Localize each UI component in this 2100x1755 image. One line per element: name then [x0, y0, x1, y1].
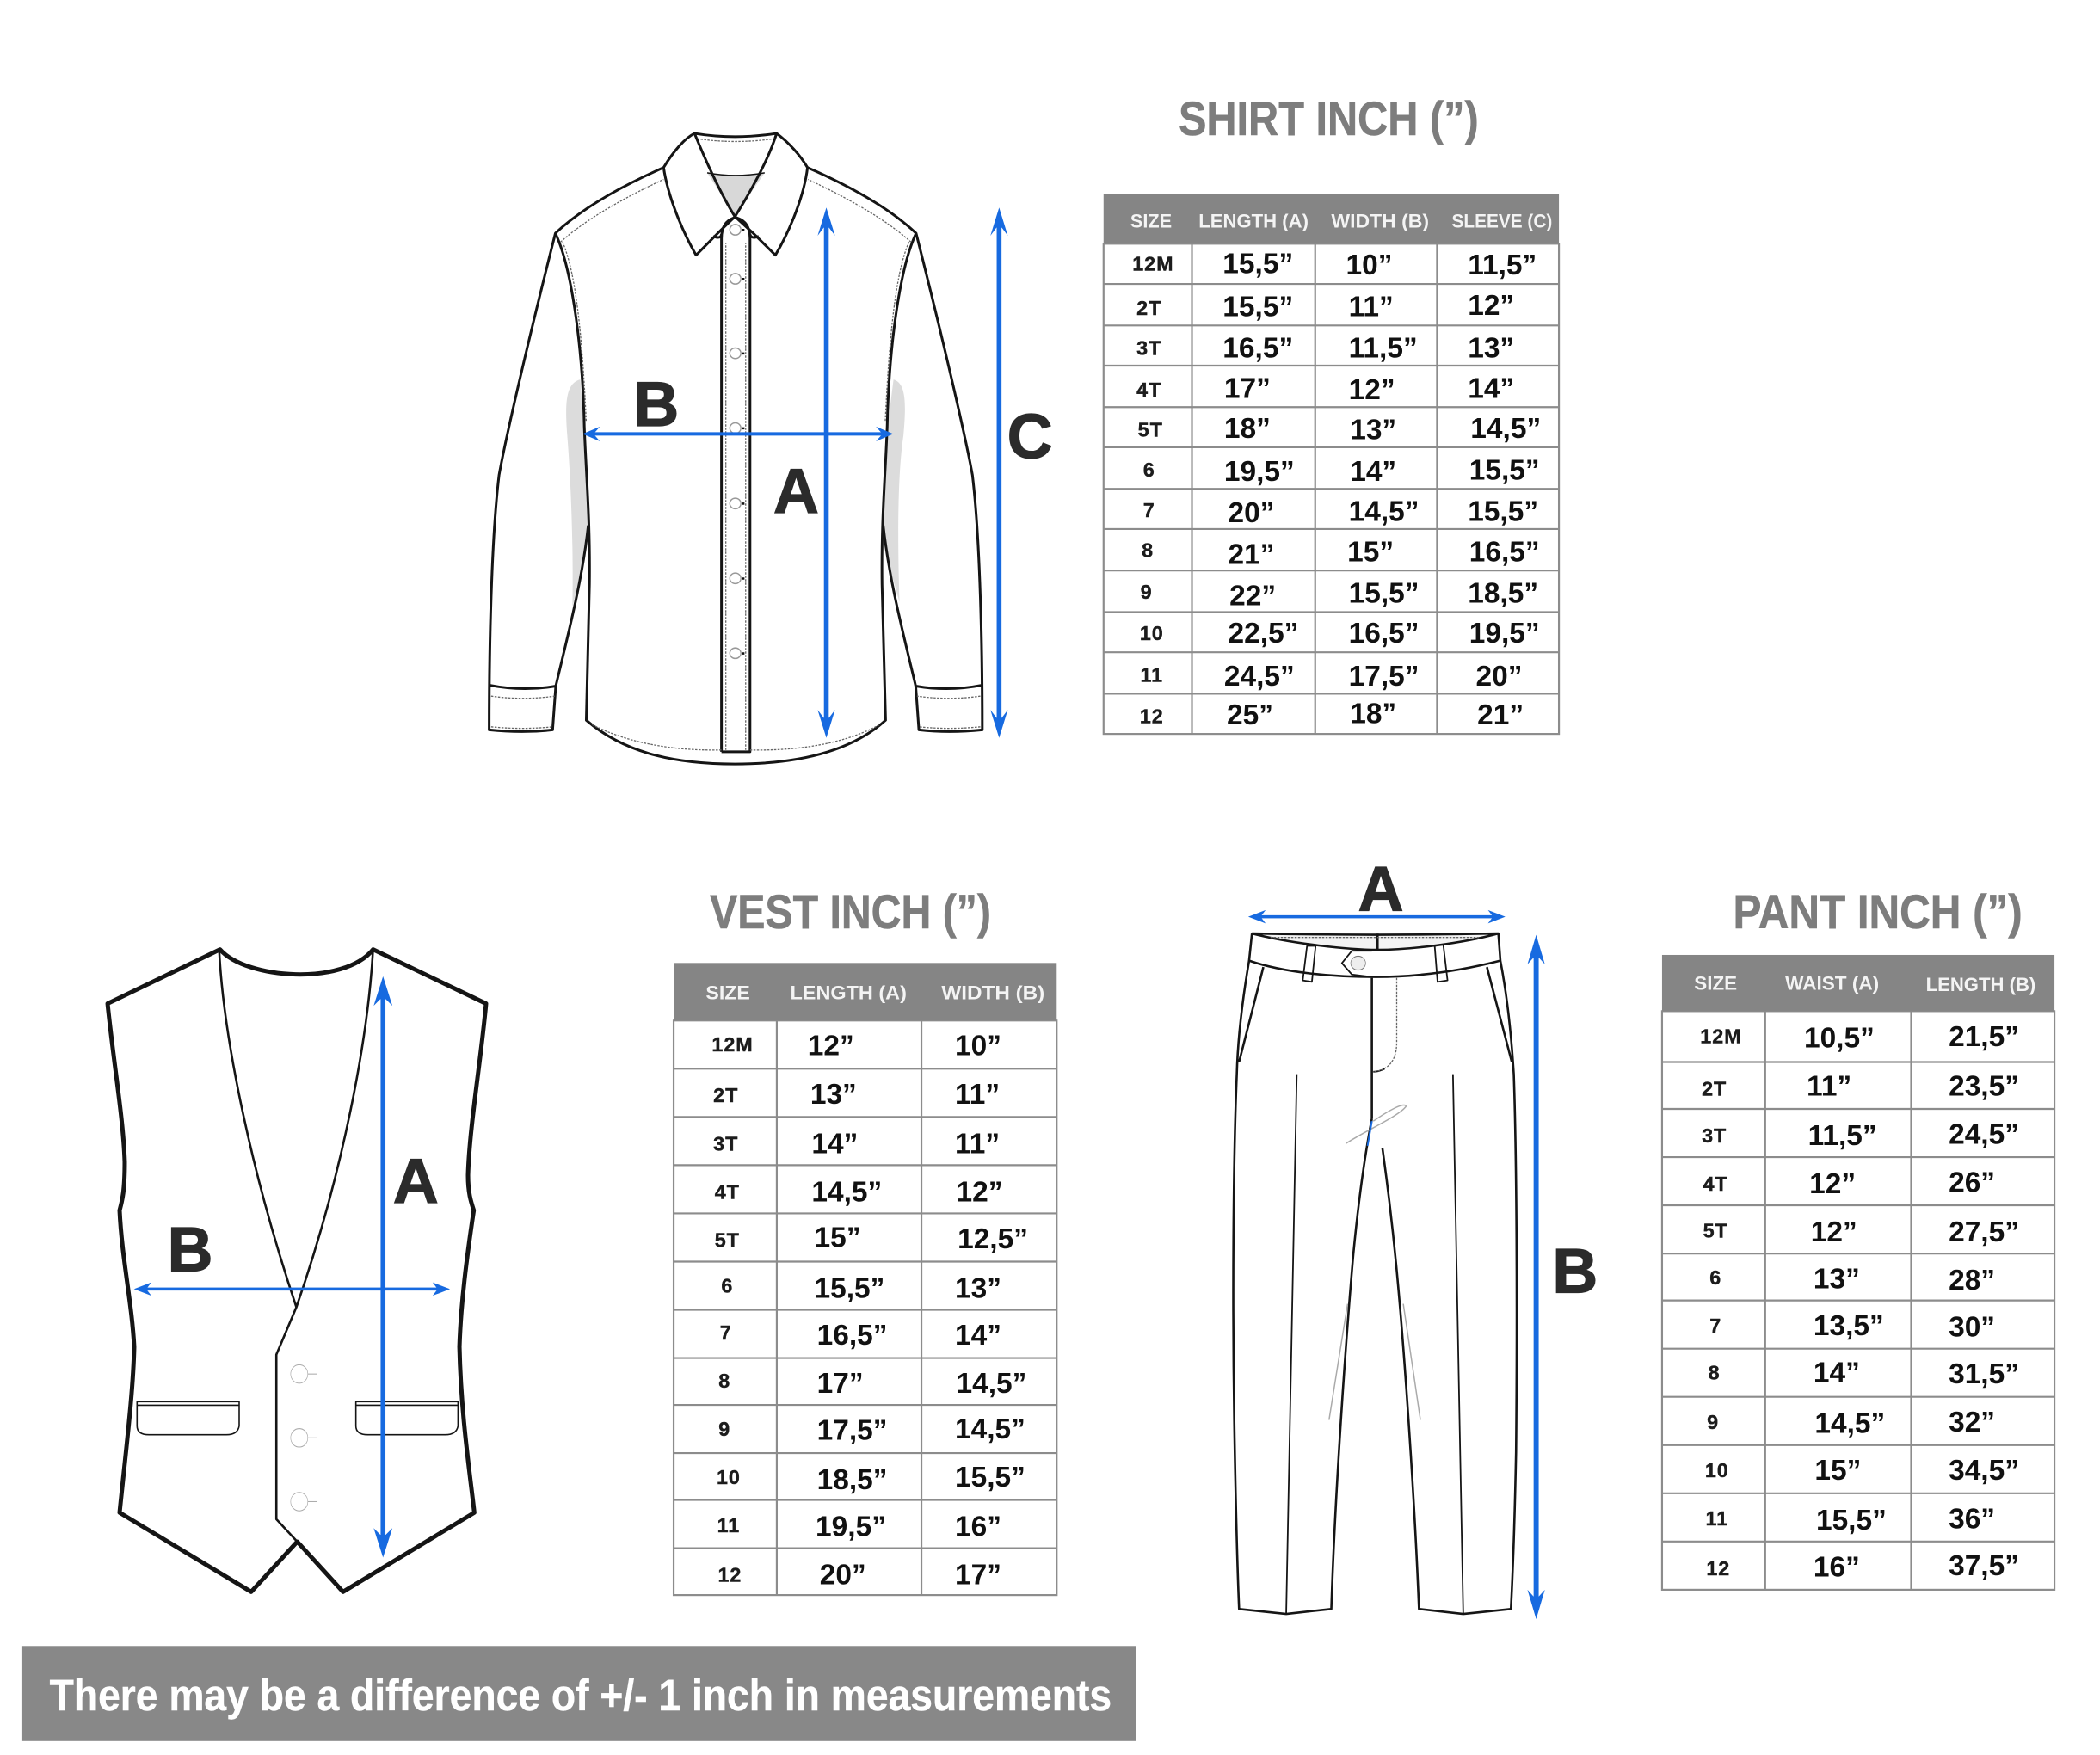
pant row 10: 34,5”: [1949, 1455, 2019, 1487]
table: pant: [1662, 955, 2054, 1590]
vest row 8: 17”: [817, 1368, 864, 1400]
pant row 4T: 12”: [1809, 1168, 1856, 1200]
letter A: A: [393, 1146, 439, 1216]
pant row 7: [1709, 1310, 1995, 1344]
vest row 11: 19,5”: [816, 1512, 886, 1543]
pant row 12: 37,5”: [1949, 1550, 2019, 1582]
shirt row 6: 14”: [1350, 456, 1396, 488]
vest row 2T: 2T: [713, 1084, 738, 1106]
pant row 8: 14”: [1814, 1358, 1860, 1389]
pant row 12M: [1700, 1021, 2019, 1054]
pant row 12: 12: [1706, 1557, 1730, 1580]
vest diagram: [108, 950, 486, 1592]
vest row 9: 9: [718, 1418, 730, 1440]
pant row 12M: 12M: [1700, 1025, 1742, 1048]
pant row 12: 16”: [1814, 1551, 1860, 1583]
vest row 12: 12: [718, 1564, 742, 1586]
pant row 9: [1707, 1407, 1995, 1440]
pant row 4T: 4T: [1703, 1173, 1728, 1195]
vest row 6: 13”: [955, 1273, 1001, 1305]
shirt row 12: 21”: [1477, 699, 1524, 731]
pant row 2T: 11”: [1807, 1070, 1851, 1102]
pant table header: WAIST (A): [1785, 972, 1879, 994]
vest row 5T: 12,5”: [958, 1223, 1028, 1255]
vest row 4T: 4T: [715, 1180, 740, 1203]
letter C: C: [1007, 401, 1053, 471]
shirt row 10: 19,5”: [1469, 618, 1540, 650]
pant row 8: 8: [1709, 1361, 1721, 1383]
vest row 2T: 11”: [955, 1079, 1000, 1111]
shirt row 4T: 14”: [1468, 373, 1514, 404]
arrow B: vest width: [134, 1283, 450, 1296]
title: vest: VEST INCH (”): [710, 884, 991, 939]
vest row 6: 15,5”: [815, 1273, 884, 1305]
pant row 2T: 23,5”: [1949, 1070, 2019, 1102]
shirt row 8: 15”: [1347, 536, 1394, 568]
disclaimer banner: [22, 1646, 1136, 1741]
vest row 10: 10: [717, 1466, 741, 1488]
shirt row 9: [1141, 578, 1538, 613]
vest row 7: [720, 1320, 1001, 1352]
shirt row 7: 20”: [1229, 497, 1275, 529]
shirt row 8: [1142, 536, 1540, 570]
shirt row 7: 7: [1143, 499, 1155, 521]
arrow B: pant length: [1527, 935, 1545, 1619]
vest row 9: 14,5”: [955, 1413, 1025, 1445]
pant row 5T: [1703, 1216, 2019, 1248]
pant row 4T: [1703, 1167, 1995, 1200]
vest row 8: [718, 1368, 1026, 1400]
shirt line drawing: [490, 133, 982, 764]
shirt row 11: 24,5”: [1224, 661, 1295, 693]
pant row 9: 14,5”: [1814, 1408, 1885, 1440]
pant row 11: [1705, 1503, 1995, 1536]
pant row 4T: 26”: [1949, 1167, 1995, 1199]
shirt row 12M: 11,5”: [1468, 249, 1537, 281]
pant row 6: [1709, 1264, 1995, 1296]
vest row 10: 18,5”: [817, 1464, 887, 1496]
shirt row 2T: 2T: [1136, 297, 1161, 319]
shirt row 12: 18”: [1350, 699, 1396, 730]
vest row 12M: 12M: [711, 1033, 754, 1056]
shirt table header: WIDTH (B): [1331, 211, 1429, 232]
table: vest: [674, 963, 1056, 1595]
vest table header: LENGTH (A): [790, 982, 907, 1003]
letter A: A: [1358, 854, 1403, 925]
shirt row 9: 15,5”: [1349, 578, 1420, 610]
pant row 7: 13,5”: [1814, 1310, 1884, 1342]
vest row 4T: 12”: [957, 1176, 1002, 1208]
shirt row 9: 9: [1141, 581, 1153, 603]
shirt row 5T: 18”: [1224, 413, 1271, 445]
vest row 10: [717, 1462, 1025, 1496]
vest line drawing: [108, 950, 486, 1592]
vest row 11: 11: [717, 1514, 740, 1536]
pant row 5T: 12”: [1811, 1216, 1857, 1248]
shirt row 4T: 4T: [1136, 379, 1161, 401]
pant row 6: 13”: [1814, 1264, 1860, 1296]
shirt table header: SLEEVE (C): [1452, 211, 1552, 232]
shirt row 5T: 13”: [1350, 415, 1396, 446]
shirt row 12M: 15,5”: [1222, 249, 1293, 280]
shirt row 9: 22”: [1229, 581, 1276, 613]
disclaimer text: There may be a difference of +/- 1 inch in measurements: [50, 1670, 1112, 1720]
shirt row 3T: 16,5”: [1222, 333, 1293, 365]
shirt table header: LENGTH (A): [1198, 211, 1309, 232]
vest row 3T: 14”: [811, 1128, 858, 1160]
vest row 9: [718, 1413, 1025, 1447]
shirt row 3T: 13”: [1468, 333, 1514, 365]
vest row 8: 8: [718, 1370, 730, 1392]
arrow A: waist: [1248, 910, 1506, 923]
shirt table header: SIZE: [1130, 211, 1172, 232]
pant row 6: 28”: [1949, 1265, 1995, 1296]
vest row 3T: 11”: [955, 1128, 1000, 1160]
pant row 9: 32”: [1949, 1407, 1995, 1438]
pant row 11: 15,5”: [1816, 1505, 1887, 1536]
shirt row 10: [1140, 618, 1540, 650]
vest row 5T: 15”: [815, 1222, 860, 1253]
shirt row 8: 8: [1142, 539, 1154, 562]
shirt row 2T: 11”: [1349, 291, 1394, 323]
pant row 3T: 24,5”: [1949, 1118, 2019, 1150]
pant table header: LENGTH (B): [1926, 974, 2035, 995]
table: shirt: [1104, 194, 1559, 734]
vest row 2T: 13”: [810, 1079, 857, 1111]
vest row 12M: 12”: [808, 1031, 854, 1062]
shirt row 5T: 5T: [1138, 419, 1163, 441]
shirt diagram: [490, 133, 1053, 764]
vest row 12: 20”: [820, 1560, 866, 1592]
shirt table header: [1104, 194, 1559, 243]
vest row 7: 14”: [955, 1320, 1001, 1352]
shirt row 8: 16,5”: [1469, 536, 1540, 568]
vest row 5T: 5T: [715, 1228, 740, 1251]
shirt row 10: 16,5”: [1349, 618, 1420, 650]
vest row 3T: 3T: [713, 1132, 738, 1155]
pant row 9: 9: [1707, 1411, 1719, 1433]
shirt row 11: 17,5”: [1349, 661, 1420, 693]
shirt row 9: 18,5”: [1468, 578, 1538, 610]
arrow B: shirt width: [582, 427, 893, 441]
vest row 7: 7: [720, 1321, 732, 1344]
arrow A: shirt length: [817, 207, 835, 738]
shirt row 2T: 15,5”: [1222, 291, 1293, 323]
shirt row 7: 14,5”: [1349, 496, 1420, 528]
pant row 11: 36”: [1949, 1503, 1995, 1535]
shirt row 11: 11: [1141, 663, 1163, 686]
shirt row 4T: 12”: [1349, 374, 1395, 406]
shirt row 3T: 11,5”: [1349, 333, 1418, 365]
pant row 10: 15”: [1814, 1455, 1861, 1487]
letter B: B: [168, 1214, 212, 1284]
vest row 3T: [713, 1128, 1000, 1160]
vest row 9: 17,5”: [817, 1415, 887, 1447]
shirt row 12: 12: [1140, 705, 1164, 728]
pant row 12: [1706, 1550, 2019, 1583]
vest row 8: 14,5”: [957, 1368, 1026, 1400]
title: pant: PANT INCH (”): [1733, 884, 2023, 939]
vest row 12: [718, 1560, 1001, 1592]
shirt row 12M: 10”: [1346, 249, 1393, 281]
pant table header: SIZE: [1694, 972, 1737, 994]
shirt row 12M: [1132, 249, 1537, 281]
shirt row 12: [1140, 699, 1524, 731]
pant row 8: 31,5”: [1949, 1358, 2019, 1390]
vest row 5T: [715, 1222, 1028, 1255]
pant row 6: 6: [1709, 1266, 1721, 1289]
pant row 2T: [1702, 1070, 2019, 1102]
pant row 5T: 27,5”: [1949, 1216, 2019, 1248]
pant row 7: 7: [1709, 1315, 1721, 1337]
vest row 12M: [711, 1031, 1001, 1062]
shirt row 8: 21”: [1229, 539, 1275, 570]
shirt row 6: [1143, 454, 1540, 488]
title: shirt: SHIRT INCH (”): [1179, 91, 1479, 145]
pant row 3T: 11,5”: [1808, 1120, 1877, 1152]
pant row 11: 11: [1705, 1507, 1728, 1530]
shirt row 12M: 12M: [1132, 252, 1173, 274]
pant line drawing: [1234, 933, 1517, 1614]
shirt row 6: 15,5”: [1469, 454, 1540, 486]
shirt row 5T: [1138, 413, 1541, 446]
arrow C: sleeve: [990, 207, 1007, 738]
shirt row 2T: 12”: [1468, 290, 1514, 322]
shirt row 6: 19,5”: [1224, 456, 1295, 488]
vest row 11: 16”: [955, 1512, 1001, 1543]
shirt row 3T: 3T: [1136, 337, 1161, 360]
pant row 2T: 2T: [1702, 1077, 1727, 1099]
pant row 10: [1705, 1455, 2019, 1487]
vest row 11: [717, 1512, 1001, 1543]
letter A: A: [773, 456, 819, 526]
pant row 12M: 10,5”: [1804, 1022, 1875, 1054]
shirt row 3T: [1136, 333, 1514, 365]
shirt row 6: 6: [1143, 459, 1155, 481]
pant row 10: 10: [1705, 1459, 1729, 1481]
letter B: B: [1552, 1235, 1598, 1306]
letter B: B: [633, 369, 679, 440]
vest row 4T: [715, 1176, 1002, 1208]
shirt row 5T: 14,5”: [1470, 413, 1541, 445]
pant row 5T: 5T: [1703, 1219, 1728, 1241]
pant table header: [1662, 955, 2054, 1011]
vest row 4T: 14,5”: [811, 1176, 882, 1208]
pant row 3T: [1702, 1118, 2019, 1152]
vest row 10: 15,5”: [955, 1462, 1025, 1493]
vest row 12: 17”: [955, 1560, 1001, 1592]
shirt row 4T: [1136, 373, 1514, 406]
arrow A: vest length: [373, 976, 392, 1558]
vest table header: [674, 963, 1056, 1020]
shirt row 10: 22,5”: [1229, 618, 1298, 650]
shirt row 11: 20”: [1476, 661, 1523, 693]
shirt row 7: 15,5”: [1468, 496, 1538, 528]
vest table header: WIDTH (B): [941, 982, 1044, 1003]
vest table header: SIZE: [705, 982, 750, 1003]
vest row 12M: 10”: [955, 1031, 1001, 1062]
pant row 3T: 3T: [1702, 1124, 1727, 1147]
shirt row 10: 10: [1140, 622, 1164, 644]
shirt row 12: 25”: [1227, 699, 1273, 731]
pant diagram: [1234, 854, 1598, 1619]
shirt row 11: [1141, 661, 1523, 693]
shirt row 7: [1143, 496, 1538, 529]
shirt row 4T: 17”: [1224, 373, 1271, 404]
vest row 2T: [713, 1079, 1000, 1111]
vest row 7: 16,5”: [817, 1320, 887, 1352]
shirt row 2T: [1136, 290, 1514, 323]
pant row 8: [1709, 1358, 2019, 1390]
pant row 7: 30”: [1949, 1312, 1995, 1344]
vest row 6: [721, 1273, 1001, 1305]
pant row 12M: 21,5”: [1949, 1021, 2019, 1053]
vest row 6: 6: [721, 1274, 733, 1296]
